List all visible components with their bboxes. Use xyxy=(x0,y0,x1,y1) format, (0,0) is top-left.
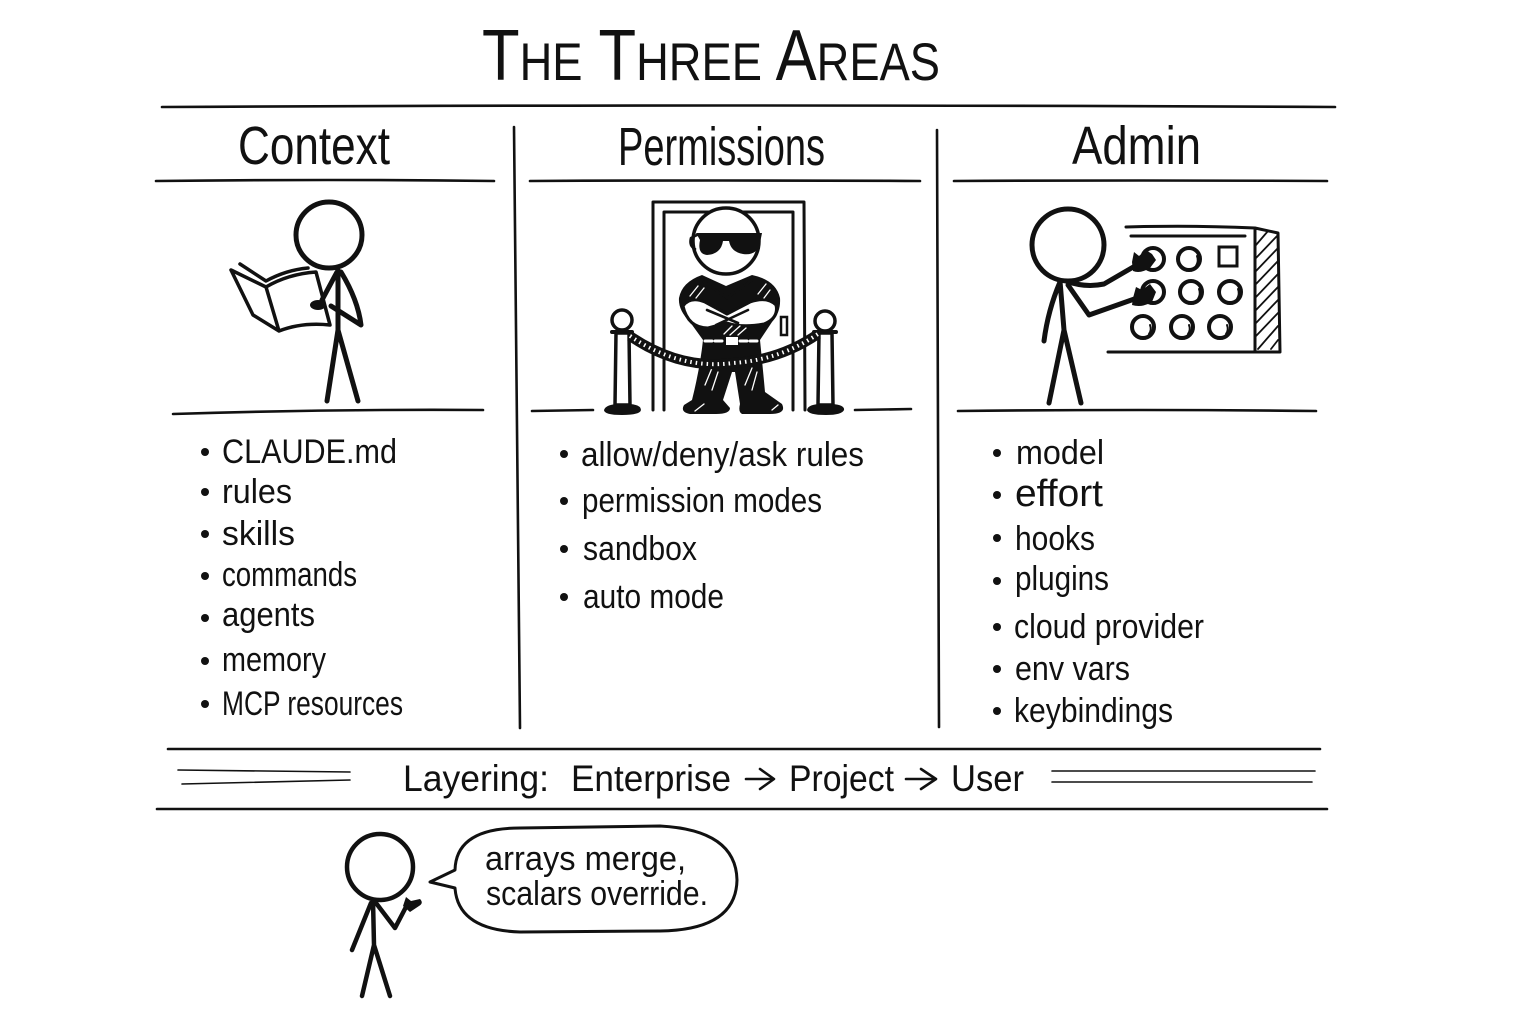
speech bubble xyxy=(430,826,737,932)
list: context items: agents xyxy=(222,596,315,634)
list: admin items: effort xyxy=(1015,473,1103,515)
list: permissions items: sandbox xyxy=(583,530,697,568)
list: permissions items: permission modes xyxy=(582,482,822,520)
layering banner: Layering: xyxy=(403,758,549,799)
list: permissions items xyxy=(560,436,864,616)
arrow: project to user xyxy=(906,769,936,789)
panel: permissions xyxy=(560,117,864,616)
list: admin items xyxy=(993,434,1204,730)
heading: permissions: Permissions xyxy=(618,117,825,177)
heading: context: Context xyxy=(238,116,390,176)
list: permissions items: allow/deny/ask rules xyxy=(581,436,864,474)
icon: stick figure pressing panel buttons xyxy=(1032,209,1280,403)
panel: context xyxy=(201,116,403,723)
list: context items: commands xyxy=(222,556,357,594)
title: THE THREE AREAS xyxy=(482,16,940,96)
list: admin items: model xyxy=(1016,434,1104,472)
layering banner: User xyxy=(951,758,1024,799)
icon: stick figure speaking xyxy=(347,834,422,996)
icon: bouncer guarding a door behind a rope xyxy=(604,202,844,415)
panel: admin xyxy=(993,116,1280,730)
layering banner: Enterprise xyxy=(571,758,731,799)
list: context items: CLAUDE.md xyxy=(222,433,397,471)
list: admin items: cloud provider xyxy=(1014,608,1204,646)
list: context items: skills xyxy=(222,515,295,553)
list: context items: rules xyxy=(222,473,292,511)
list: admin items: plugins xyxy=(1015,560,1109,598)
list: admin items: env vars xyxy=(1015,650,1130,688)
list: permissions items: auto mode xyxy=(583,578,724,616)
layering banner: Project xyxy=(789,758,895,799)
heading: admin: Admin xyxy=(1072,116,1201,176)
list: context items xyxy=(201,433,403,723)
speech bubble: arrays merge, xyxy=(485,840,686,878)
icon: stick figure reading a book xyxy=(231,202,362,401)
arrow: enterprise to project xyxy=(746,769,774,789)
list: admin items: keybindings xyxy=(1014,692,1173,730)
list: context items: MCP resources xyxy=(222,685,403,723)
speech bubble: scalars override. xyxy=(486,875,708,913)
list: context items: memory xyxy=(222,641,326,679)
list: admin items: hooks xyxy=(1015,520,1095,558)
layering banner xyxy=(178,758,1315,799)
